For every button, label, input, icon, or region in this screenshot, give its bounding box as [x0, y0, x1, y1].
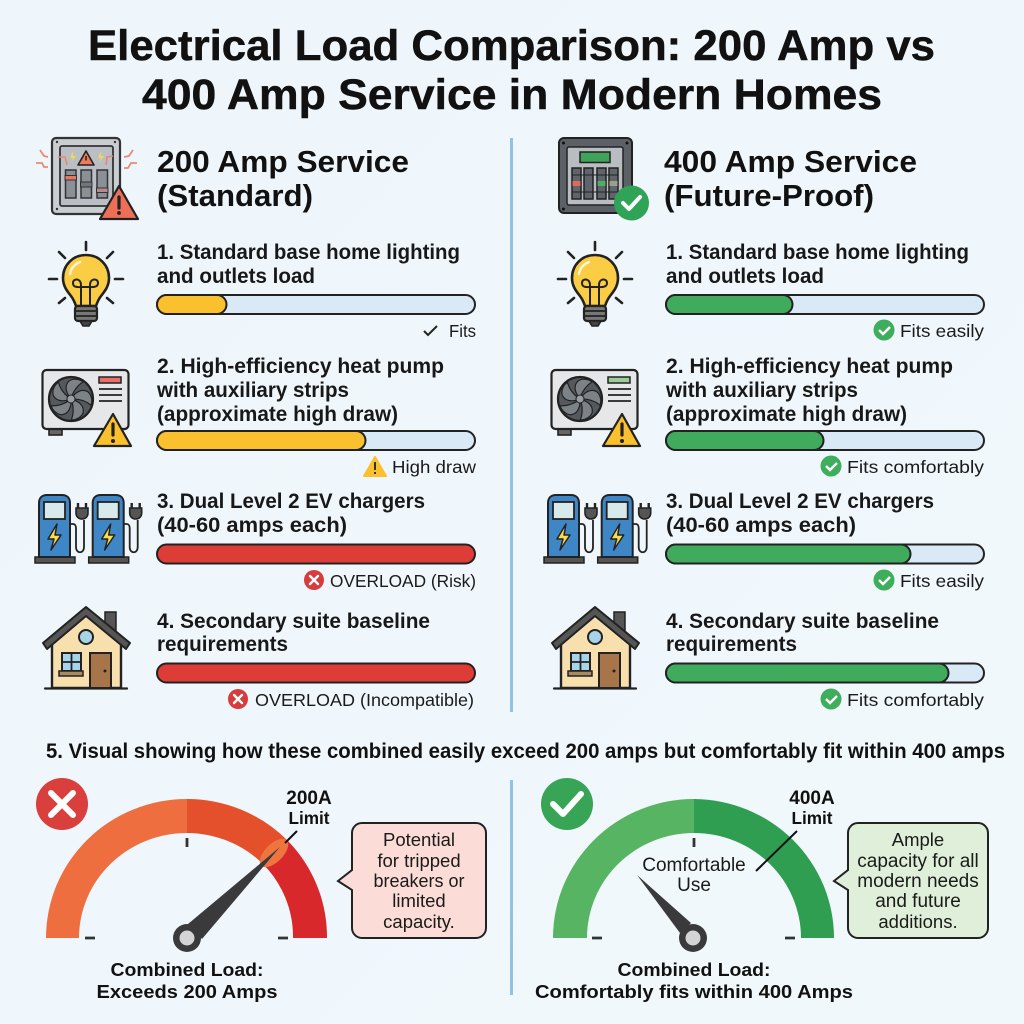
comfortable use label: Comfortable — [642, 855, 746, 876]
callout: and future — [875, 891, 961, 912]
gauge needle — [637, 875, 707, 952]
row 2 text: with auxiliary strips — [156, 379, 349, 402]
row 3 text: 3. Dual Level 2 EV chargers — [157, 490, 425, 513]
icon: light bulb — [558, 242, 632, 326]
row 3 text: (40-60 amps each) — [666, 514, 856, 537]
row 2 status: Fits comfortably — [847, 457, 984, 477]
icon: dual EV chargers — [544, 495, 651, 563]
row 1 text — [666, 241, 969, 288]
limit label: Limit — [288, 808, 330, 828]
gauge caption — [535, 959, 853, 1002]
row 2 text: 2. High-efficiency heat pump — [666, 355, 953, 378]
row 1 text: and outlets load — [157, 265, 315, 288]
icon: dual EV chargers — [35, 495, 142, 563]
row 1 status: Fits — [449, 321, 476, 341]
gauge arc — [553, 799, 834, 938]
row 1 text: and outlets load — [666, 265, 824, 288]
row 1 text: 1. Standard base home lighting — [666, 241, 969, 264]
heading: 400 amp service: 400 Amp Service — [664, 145, 917, 179]
row 1 bar — [666, 295, 984, 314]
heading: 400 amp service: (Future-Proof) — [664, 179, 874, 213]
row 3 text: 3. Dual Level 2 EV chargers — [666, 490, 934, 513]
panel: 200 amp service — [35, 138, 476, 710]
limit label: 200A — [286, 788, 332, 809]
heading: 200 amp service: (Standard) — [157, 179, 313, 213]
gauge needle — [173, 847, 280, 952]
icon: red cross badge — [36, 778, 88, 830]
heading: 200 amp service: 200 Amp Service — [157, 145, 409, 179]
panel: 200 amp gauge — [36, 778, 486, 1002]
row 2 text: (approximate high draw) — [666, 403, 907, 426]
row 3 bar — [157, 544, 475, 564]
row 4 text: requirements — [666, 633, 797, 656]
row 2 status: High draw — [392, 457, 476, 477]
row 2 bar — [666, 431, 984, 450]
icon: healthy breaker panel — [559, 138, 649, 220]
callout: Potential — [383, 829, 455, 850]
callout: additions. — [878, 911, 958, 932]
row 2 text: (approximate high draw) — [157, 403, 398, 426]
row 3 text: (40-60 amps each) — [157, 514, 347, 537]
callout — [834, 823, 988, 938]
icon: light bulb — [49, 242, 123, 326]
row 4 status: OVERLOAD (Incompatible) — [255, 690, 474, 710]
callout: modern needs — [857, 871, 979, 892]
limit label: Limit — [791, 808, 833, 828]
row 3 status — [874, 570, 984, 591]
row 1 status: Fits easily — [900, 321, 984, 341]
icon: house — [43, 607, 130, 688]
title: 400 Amp Service in Modern Homes — [142, 71, 882, 119]
icon: house — [552, 607, 639, 688]
row 1 status — [874, 320, 984, 341]
panel: 400 amp gauge — [535, 778, 988, 1002]
row 4 text: 4. Secondary suite baseline — [157, 610, 430, 633]
row 2 text: 2. High-efficiency heat pump — [157, 355, 444, 378]
row 4 text — [157, 610, 430, 656]
gauge caption: Exceeds 200 Amps — [96, 981, 278, 1002]
row 3 status: Fits easily — [900, 571, 984, 591]
comfortable use label: Use — [677, 875, 711, 896]
section 5 heading: 5. Visual showing how these combined easily exceed 200 amps but comfortably fit within 400 amps — [46, 740, 1005, 763]
gauge caption — [96, 959, 278, 1002]
gauge caption: Combined Load: — [110, 959, 264, 980]
icon: overloaded breaker panel — [36, 138, 138, 219]
title: Electrical Load Comparison: 200 Amp vs — [88, 22, 935, 70]
gauge arc — [46, 799, 327, 938]
row 1 text — [157, 241, 460, 288]
icon: heat pump — [552, 370, 640, 446]
callout: breakers or — [373, 871, 465, 891]
row 4 text: 4. Secondary suite baseline — [666, 610, 939, 633]
title — [88, 22, 935, 119]
gauge caption: Combined Load: — [618, 959, 770, 980]
row 4 bar — [157, 664, 475, 682]
row 1 status — [424, 321, 476, 341]
row 4 bar — [666, 664, 984, 682]
row 4 text: requirements — [157, 633, 288, 656]
limit label — [285, 788, 332, 843]
heading: 400 amp service — [664, 145, 917, 213]
row 2 text: with auxiliary strips — [665, 379, 858, 402]
row 1 bar — [157, 295, 475, 314]
limit label: 400A — [789, 788, 835, 809]
row 2 text — [665, 355, 953, 426]
panel: 400 amp service — [544, 138, 984, 710]
icon: green check badge — [541, 778, 593, 830]
comfortable use label — [642, 855, 746, 896]
row 2 bar — [157, 431, 475, 450]
callout: capacity. — [383, 911, 455, 932]
row 3 status: OVERLOAD (Risk) — [330, 571, 476, 591]
row 3 text — [157, 490, 425, 537]
row 4 status: Fits comfortably — [847, 690, 984, 710]
heading: 200 amp service — [157, 145, 409, 213]
icon: heat pump — [42, 370, 131, 446]
callout: limited — [392, 890, 446, 911]
callout: Ample — [892, 829, 944, 850]
row 2 text — [156, 355, 444, 426]
row 3 bar — [666, 544, 984, 564]
row 4 text — [666, 610, 939, 656]
limit label — [756, 788, 835, 871]
gauge caption: Comfortably fits within 400 Amps — [535, 981, 853, 1002]
callout: capacity for all — [857, 851, 979, 872]
callout — [338, 823, 486, 938]
row 3 text — [666, 490, 934, 537]
row 1 text: 1. Standard base home lighting — [157, 241, 460, 264]
callout: for tripped — [377, 850, 461, 871]
